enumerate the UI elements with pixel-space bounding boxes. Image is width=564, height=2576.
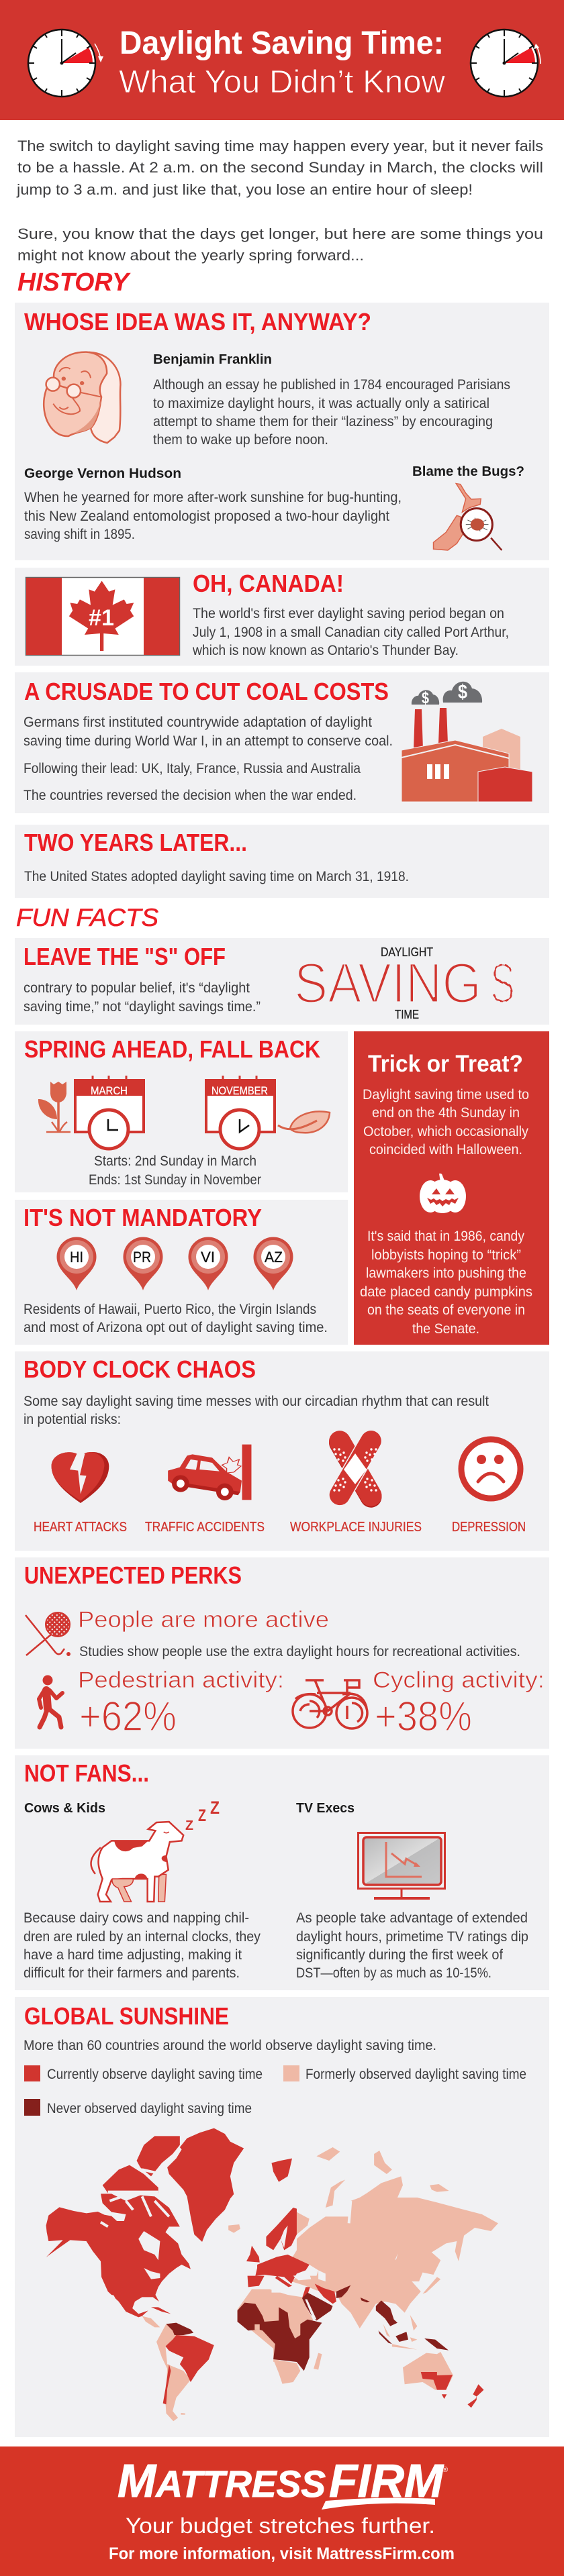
icon: pin HI bbox=[56, 1237, 97, 1290]
stat: cycling activity bbox=[373, 1667, 545, 1740]
panel: whose idea was it bbox=[15, 303, 549, 560]
risk labels: DEPRESSION bbox=[452, 1520, 526, 1535]
dates text bbox=[89, 1153, 261, 1188]
risk labels: TRAFFIC ACCIDENTS bbox=[145, 1520, 265, 1535]
body text: Germans first instituted countrywide adaptation of daylight bbox=[23, 715, 372, 730]
icon: pin AZ bbox=[254, 1237, 293, 1290]
icon: jack-o'-lantern bbox=[420, 1174, 466, 1213]
icon: right clock bbox=[471, 30, 540, 97]
legend bbox=[24, 2065, 526, 2116]
icon: sleeping cow: Z bbox=[210, 1798, 220, 1818]
text: candy lobbyists: lawmakers into pushing the bbox=[366, 1266, 526, 1281]
icon: walking person bbox=[39, 1675, 62, 1727]
icon: left clock bbox=[28, 30, 103, 97]
stat: pedestrian activity: +62% bbox=[79, 1694, 177, 1740]
text: cows and kids bbox=[23, 1910, 261, 1981]
icon: tulip bbox=[38, 1082, 70, 1132]
dates text: Starts: 2nd Sunday in March bbox=[94, 1153, 256, 1169]
Mattress Firm logo: ® bbox=[442, 2466, 448, 2474]
risk labels: HEART ATTACKS bbox=[34, 1520, 127, 1535]
icon: sleeping cow: Z bbox=[185, 1818, 193, 1833]
heading: Trick or Treat? bbox=[368, 1051, 523, 1077]
intro text: jump to 3 a.m. and just like that, you lose an entire hour of sleep! bbox=[16, 181, 473, 198]
intro text: might not know about the yearly spring forward... bbox=[17, 247, 364, 264]
body text bbox=[23, 1394, 489, 1427]
text: tv execs: daylight hours, primetime TV ratings dip bbox=[296, 1929, 528, 1945]
icon: March calendar with clock: MARCH bbox=[91, 1084, 128, 1097]
text: tv execs: significantly during the first week of bbox=[296, 1947, 503, 1963]
text: halloween end date: October, which occasionally bbox=[363, 1124, 528, 1139]
title bbox=[119, 25, 445, 100]
intro text: The switch to daylight saving time may happen every year, but it never fails bbox=[17, 138, 543, 154]
Mattress Firm logo: MATTRESS bbox=[117, 2455, 326, 2507]
section heading: fun facts: FUN FACTS bbox=[16, 904, 158, 931]
wordmark: daylight saving time: SAVING bbox=[294, 951, 481, 1015]
panel: unexpected perks bbox=[15, 1557, 549, 1749]
icon: pin HI: HI bbox=[70, 1249, 83, 1266]
heading: WHOSE IDEA WAS IT, ANYWAY? bbox=[24, 308, 371, 336]
icon: factory with money smoke: $ bbox=[422, 689, 430, 707]
text: cows and kids: have a hard time adjusting, making it bbox=[23, 1947, 242, 1963]
panel: not mandatory bbox=[15, 1200, 348, 1345]
intro text: to be a hassle. At 2 a.m. on the second Sunday in March, the clocks will bbox=[17, 159, 543, 176]
text: tv execs: DST—often by as much as 10-15%. bbox=[296, 1965, 491, 1981]
text: candy lobbyists bbox=[360, 1229, 532, 1337]
icon: racket and golf club bbox=[26, 1612, 70, 1656]
Benjamin Franklin text: to maximize daylight hours, it was actually only a satirical bbox=[153, 396, 489, 411]
body text: contrary to popular belief, it's “daylight bbox=[23, 980, 250, 996]
body text: Residents of Hawaii, Puerto Rico, the Virgin Islands bbox=[23, 1302, 316, 1317]
George Vernon Hudson text: George Vernon Hudson bbox=[24, 466, 181, 481]
text: halloween end date: end on the 4th Sunday in bbox=[372, 1105, 520, 1121]
heading: GLOBAL SUNSHINE bbox=[24, 2002, 229, 2030]
Mattress Firm logo bbox=[117, 2455, 448, 2510]
heading: NOT FANS... bbox=[24, 1759, 149, 1787]
text: cows and kids: Because dairy cows and napping chil- bbox=[23, 1910, 249, 1926]
panel: body clock chaos bbox=[15, 1351, 549, 1551]
icon: November calendar with clock bbox=[205, 1076, 275, 1149]
body text: in potential risks: bbox=[23, 1412, 121, 1427]
legend: Formerly observed daylight saving time bbox=[306, 2067, 526, 2082]
icon: factory with money smoke: $ bbox=[458, 681, 467, 703]
icon: New Zealand under magnifier bbox=[434, 484, 502, 550]
body text: July 1, 1908 in a small Canadian city called Port Arthur, bbox=[193, 625, 509, 640]
heading: BODY CLOCK CHAOS bbox=[23, 1355, 256, 1383]
icon: car crash bbox=[168, 1445, 251, 1500]
body text bbox=[192, 606, 509, 658]
Benjamin Franklin text: them to wake up before noon. bbox=[153, 432, 328, 448]
icon: pin PR bbox=[124, 1237, 162, 1290]
body text: The world's first ever daylight saving period began on bbox=[193, 606, 504, 621]
Benjamin Franklin text: Benjamin Franklin bbox=[153, 352, 272, 367]
panel: not fans bbox=[15, 1755, 549, 1990]
panel: global sunshine bbox=[15, 1997, 549, 2437]
George Vernon Hudson text: saving shift in 1895. bbox=[24, 527, 135, 542]
body text: More than 60 countries around the world observe daylight saving time. bbox=[23, 2038, 436, 2053]
text: halloween end date bbox=[363, 1087, 529, 1157]
heading: IT'S NOT MANDATORY bbox=[23, 1204, 262, 1231]
text: candy lobbyists: the Senate. bbox=[412, 1321, 479, 1337]
text: candy lobbyists: date placed candy pumpkins bbox=[360, 1284, 532, 1300]
heading: OH, CANADA! bbox=[193, 570, 344, 597]
risk labels: WORKPLACE INJURIES bbox=[290, 1520, 422, 1535]
icon: pin VI bbox=[188, 1237, 228, 1290]
text: cows and kids: difficult for their farmers and parents. bbox=[23, 1965, 240, 1981]
text: candy lobbyists: lobbyists hoping to “trick” bbox=[371, 1247, 521, 1263]
stat: pedestrian activity bbox=[78, 1667, 284, 1740]
subheading: people are more active: People are more active bbox=[78, 1607, 329, 1633]
icon: crossed bandages bbox=[325, 1426, 385, 1512]
George Vernon Hudson text bbox=[24, 466, 402, 542]
body text: The United States adopted daylight saving time on March 31, 1918. bbox=[24, 869, 409, 884]
wordmark: daylight saving time: TIME bbox=[395, 1008, 419, 1021]
icon: bicycle bbox=[293, 1680, 367, 1729]
George Vernon Hudson text: When he yearned for more after-work sunshine for bug-hunting, bbox=[24, 490, 402, 505]
world map bbox=[46, 2128, 498, 2421]
body text: and most of Arizona opt out of daylight saving time. bbox=[23, 1320, 328, 1335]
text: tv execs bbox=[296, 1910, 528, 1981]
icon: pin VI: VI bbox=[201, 1249, 215, 1266]
icon: Canadian flag bbox=[26, 577, 180, 655]
icon: tv with falling ratings bbox=[359, 1833, 444, 1900]
legend: Never observed daylight saving time bbox=[47, 2101, 252, 2116]
heading: TWO YEARS LATER... bbox=[24, 829, 247, 856]
subheading: cows and kids: Cows & Kids bbox=[24, 1801, 105, 1816]
panel: coal costs bbox=[15, 672, 549, 813]
text: tv execs: As people take advantage of extended bbox=[296, 1910, 528, 1926]
stat: pedestrian activity: Pedestrian activity: bbox=[78, 1667, 284, 1693]
icon: factory with money smoke bbox=[402, 681, 532, 802]
icon: Canadian flag: #1 bbox=[89, 605, 114, 631]
icon: broken heart bbox=[52, 1452, 109, 1503]
heading: UNEXPECTED PERKS bbox=[24, 1561, 242, 1589]
panel: trick or treat bbox=[354, 1031, 549, 1345]
body text bbox=[23, 715, 393, 803]
icon: Benjamin Franklin bbox=[44, 352, 120, 443]
legend: Currently observe daylight saving time bbox=[47, 2067, 263, 2082]
body text: Following their lead: UK, Italy, France, Russia and Australia bbox=[23, 761, 361, 776]
text: cows and kids: dren are ruled by an internal clocks, they bbox=[23, 1929, 261, 1945]
body text: The countries reversed the decision when the war ended. bbox=[23, 788, 357, 803]
title: What You Didn’t Know bbox=[119, 64, 445, 100]
dates text: Ends: 1st Sunday in November bbox=[89, 1172, 261, 1188]
panel: leave the s off bbox=[15, 938, 549, 1025]
Mattress Firm logo: FIRM bbox=[329, 2455, 444, 2507]
body text: Some say daylight saving time messes with our circadian rhythm that can result bbox=[23, 1394, 489, 1409]
intro text bbox=[16, 138, 543, 264]
stat: cycling activity: Cycling activity: bbox=[373, 1667, 545, 1693]
George Vernon Hudson text: this New Zealand entomologist proposed a two-hour daylight bbox=[24, 509, 389, 524]
risk labels bbox=[34, 1520, 526, 1535]
icon: pin AZ: AZ bbox=[265, 1249, 283, 1266]
icon: sleeping cow: Z bbox=[198, 1806, 206, 1825]
panel: two years later bbox=[15, 825, 549, 898]
icon: March calendar with clock bbox=[74, 1076, 145, 1149]
icon: sad face bbox=[461, 1439, 520, 1498]
callout: blame the bugs: Blame the Bugs? bbox=[412, 464, 524, 479]
wordmark: daylight saving time: S bbox=[490, 951, 515, 1015]
website line: For more information, visit MattressFirm.com bbox=[109, 2544, 455, 2563]
icon: autumn leaf bbox=[278, 1111, 330, 1133]
text: candy lobbyists: It's said that in 1986, candy bbox=[367, 1229, 524, 1244]
section heading: history: HISTORY bbox=[17, 268, 132, 297]
footer banner bbox=[0, 2446, 564, 2576]
text: halloween end date: Daylight saving time used to bbox=[363, 1087, 529, 1102]
wordmark: daylight saving time: DAYLIGHT bbox=[381, 945, 433, 959]
panel: oh canada bbox=[15, 568, 549, 666]
Benjamin Franklin text bbox=[153, 352, 510, 448]
icon: sleeping cow bbox=[91, 1798, 220, 1902]
body text: Studies show people use the extra daylight hours for recreational activities. bbox=[79, 1644, 520, 1659]
icon: November calendar with clock: NOVEMBER bbox=[211, 1084, 268, 1097]
heading: SPRING AHEAD, FALL BACK bbox=[24, 1035, 320, 1063]
heading: A CRUSADE TO CUT COAL COSTS bbox=[24, 678, 389, 705]
subheading: tv execs: TV Execs bbox=[296, 1801, 355, 1816]
tagline: Your budget stretches further. bbox=[126, 2514, 435, 2538]
stat: cycling activity: +38% bbox=[375, 1694, 472, 1740]
panel: spring ahead fall back bbox=[15, 1031, 348, 1192]
body text: saving time,” not “daylight savings time.” bbox=[23, 999, 261, 1015]
Benjamin Franklin text: Although an essay he published in 1784 encouraged Parisians bbox=[153, 377, 510, 393]
wordmark: daylight saving time: S bbox=[490, 951, 515, 1015]
title: Daylight Saving Time: bbox=[120, 25, 444, 61]
icon: pin PR: PR bbox=[133, 1249, 151, 1266]
body text bbox=[23, 1302, 328, 1335]
text: candy lobbyists: on the seats of everyone in bbox=[367, 1302, 525, 1318]
Benjamin Franklin text: attempt to shame them for their “laziness” by encouraging bbox=[153, 414, 493, 429]
body text bbox=[23, 980, 261, 1015]
header banner bbox=[0, 0, 564, 120]
body text: saving time during World War I, in an attempt to conserve coal. bbox=[23, 733, 393, 749]
text: halloween end date: coincided with Halloween. bbox=[369, 1142, 522, 1157]
body text: which is now known as Ontario's Thunder Bay. bbox=[192, 643, 459, 658]
heading: LEAVE THE "S" OFF bbox=[23, 943, 226, 970]
intro text: Sure, you know that the days get longer, but here are some things you bbox=[17, 225, 543, 242]
